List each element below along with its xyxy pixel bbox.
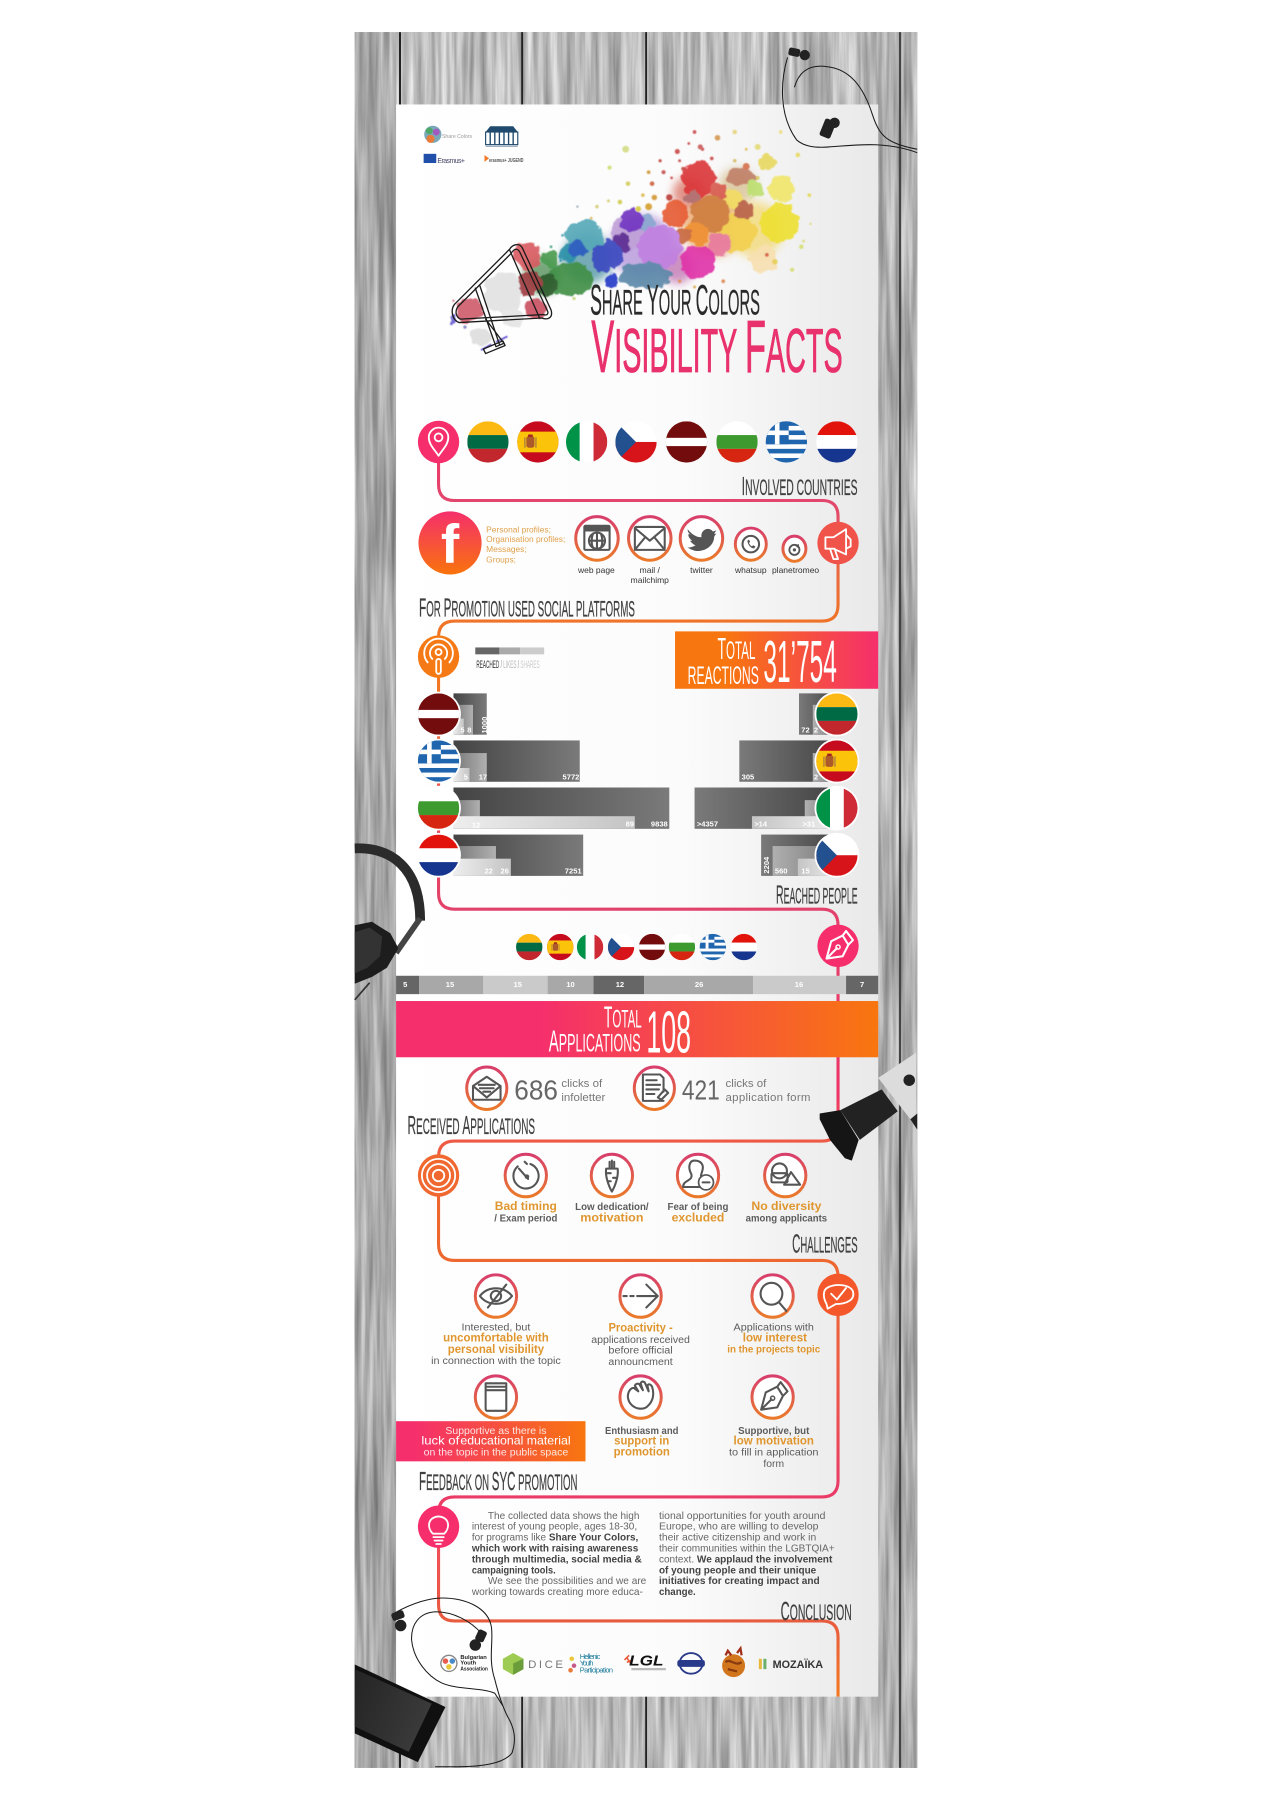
logo: globe xyxy=(722,1648,745,1677)
text: CHALLENGES xyxy=(792,1228,858,1258)
title: Visibility Facts: VISIBILITY FACTS xyxy=(591,305,843,388)
title: Share Your Colors: SHARE YOUR COLORS xyxy=(590,277,760,325)
bar chart: Netherlands: 7251 xyxy=(565,867,582,876)
icon: whatsapp xyxy=(735,528,766,560)
section: involved countries xyxy=(418,421,858,501)
icon: podcast node xyxy=(418,635,459,678)
icon: megaphone xyxy=(452,245,552,354)
partner logos bottom xyxy=(441,1648,823,1677)
bar chart: Italy: >14 xyxy=(754,820,768,829)
logo: LGL: LGL xyxy=(629,1653,664,1670)
logo: Hellenic Youth Participation: Youth xyxy=(580,1659,594,1668)
icon: target node xyxy=(418,1154,459,1197)
legend: REACHED / LIKES / SHARES xyxy=(476,659,540,671)
logo: Bulgarian Youth Association xyxy=(441,1655,488,1672)
logo: erasmus+ 2: erasmus+ JUGEND xyxy=(489,158,524,164)
stat: infoletter clicks xyxy=(467,1067,606,1110)
logo: Share Your Colors: Share Colors xyxy=(442,134,473,140)
feedback: low motivation: low motivation xyxy=(734,1434,814,1448)
props: headphones left xyxy=(355,848,420,1000)
stat: application form clicks: clicks of xyxy=(726,1078,767,1090)
poster sheet xyxy=(396,104,878,1697)
section: reached people: REACHED PEOPLE xyxy=(776,879,858,909)
logo: Bulgarian Youth Association: Bulgarian xyxy=(460,1655,487,1661)
conclusion text column 2: their active citizenship and work in xyxy=(659,1533,816,1544)
applications per country strip: 16 xyxy=(795,980,803,989)
platform labels: twitter xyxy=(690,565,713,575)
platform labels: web page xyxy=(577,565,615,575)
watercolour splash xyxy=(450,130,812,350)
feedback: educational material xyxy=(396,1376,585,1461)
bar chart: Spain: 305 xyxy=(742,772,754,781)
wood table background xyxy=(355,32,917,1768)
stat: application form clicks: 421 xyxy=(682,1075,720,1106)
logo: Mozaika: MOZAÏKA xyxy=(773,1658,823,1671)
challenge: no diversity: No diversity xyxy=(751,1199,822,1213)
conclusion text column 2: tional opportunities for youth around xyxy=(659,1511,825,1522)
logo: LGL xyxy=(625,1653,666,1670)
feedback: proactivity xyxy=(591,1275,690,1368)
stat: application form clicks xyxy=(634,1067,810,1110)
challenge: fear of being excluded: excluded xyxy=(672,1210,724,1224)
conclusion text column 1: campaigning tools. xyxy=(472,1565,556,1576)
bar chart: Greece: 17 xyxy=(479,772,487,781)
challenge: fear of being excluded: Fear of being xyxy=(668,1202,728,1213)
bar chart: Italy xyxy=(695,786,859,831)
icon: facebook xyxy=(418,511,482,575)
applications per country strip: 10 xyxy=(566,980,575,989)
challenge: low dedication xyxy=(575,1154,649,1224)
icon: twitter xyxy=(680,517,723,560)
bar chart: Greece xyxy=(416,739,580,783)
conclusion text column 1 xyxy=(471,1511,647,1598)
stat: infoletter clicks: clicks of xyxy=(561,1078,603,1090)
icon: bulb node xyxy=(418,1506,459,1548)
bar chart: Latvia xyxy=(416,692,489,736)
logo: Erasmus+: Erasmus+ xyxy=(437,158,465,165)
feedback: enthusiasm: Enthusiasm and xyxy=(605,1426,678,1437)
bar chart: Czech Republic xyxy=(761,833,859,878)
bar chart: Spain xyxy=(739,739,859,783)
props: earbuds top right xyxy=(782,47,917,153)
applications per country strip: 5 xyxy=(403,980,407,989)
feedback: uncomfortable: Interested, but xyxy=(462,1322,531,1333)
feedback: low interest xyxy=(727,1275,821,1355)
bar chart: Lithuania: 2 xyxy=(814,725,818,734)
conclusion text column 2: of young people and their unique xyxy=(659,1565,817,1576)
icon: location pin node xyxy=(418,421,459,463)
bar chart: Greece: 5 xyxy=(464,772,468,781)
conclusion text column 2: context. We applaud the involvement xyxy=(659,1554,833,1565)
logo: Hellenic Youth Participation xyxy=(568,1652,613,1675)
logo: DICE: DICE xyxy=(528,1659,566,1671)
feedback: enthusiasm xyxy=(605,1376,678,1459)
conclusion text column 2: Europe, who are willing to develop xyxy=(659,1522,819,1533)
feedback: educational material: on the topic in the public space xyxy=(424,1448,569,1459)
feedback: proactivity: applications received xyxy=(591,1335,690,1346)
feedback: enthusiasm: promotion xyxy=(614,1445,670,1459)
icon: facebook: f xyxy=(441,512,460,574)
challenge: low dedication: motivation xyxy=(580,1210,643,1224)
bar chart: Italy: >4357 xyxy=(697,820,718,829)
facebook usage list: Organisation profiles; xyxy=(486,534,565,544)
feedback: proactivity: Proactivity - xyxy=(608,1321,673,1335)
challenge: no diversity: among applicants xyxy=(746,1213,828,1224)
applications per country strip: 15 xyxy=(446,980,454,989)
section: conclusion xyxy=(418,1506,852,1626)
feedback: proactivity: announcment xyxy=(608,1357,673,1368)
bar chart: Italy: >31 xyxy=(802,820,815,829)
props: camera right xyxy=(820,1053,917,1161)
applications per country strip: 7 xyxy=(860,980,864,989)
banner: total reactions: 31’754 xyxy=(763,628,837,695)
small flags xyxy=(516,934,757,960)
platform labels: planetromeo xyxy=(772,565,819,575)
country flags xyxy=(467,421,858,463)
facebook usage list: Messages; xyxy=(486,544,527,554)
banner: total applications: APPLICATIONS xyxy=(549,1026,641,1059)
banner: total applications: TOTAL xyxy=(604,1001,642,1034)
bar chart: Latvia: 1000 xyxy=(480,717,489,734)
heading: received applications: RECEIVED APPLICATIONS xyxy=(408,1110,535,1140)
conclusion text column 1: We see the possibilities and we are xyxy=(488,1576,647,1587)
bar chart: Czech Republic: 15 xyxy=(801,867,810,876)
facebook usage list xyxy=(486,525,565,564)
feedback: low motivation: to fill in application xyxy=(729,1448,819,1459)
stat: infoletter clicks: 686 xyxy=(514,1075,558,1106)
section: received applications xyxy=(396,925,878,1140)
section: social platforms: FOR PROMOTION USED SOCIAL PLATFORMS xyxy=(419,592,635,622)
bar chart: Lithuania: 72 xyxy=(801,725,810,734)
bar chart: Netherlands: 22 xyxy=(484,867,493,876)
bar chart: Netherlands: 26 xyxy=(501,867,509,876)
legend xyxy=(475,647,544,671)
section: feedback xyxy=(396,1274,859,1496)
bar chart: Greece: 5772 xyxy=(563,772,579,781)
conclusion text column 2: initiatives for creating impact and xyxy=(659,1576,820,1587)
applications per country strip xyxy=(396,976,878,994)
challenge: bad timing xyxy=(494,1154,557,1224)
feedback: enthusiasm: support in xyxy=(614,1434,669,1448)
logo: DICE xyxy=(503,1653,566,1675)
partner logos top xyxy=(424,126,524,165)
platform labels xyxy=(577,565,819,585)
feedback: uncomfortable xyxy=(431,1275,561,1367)
conclusion text column 2 xyxy=(659,1511,835,1598)
banner: total applications xyxy=(396,999,878,1066)
feedback: uncomfortable: personal visibility xyxy=(448,1342,545,1356)
banner: total reactions xyxy=(675,628,878,695)
props: phone and earbuds bottom left xyxy=(355,1598,514,1767)
conclusion text column 2: their communities within the LGBTQIA+ xyxy=(659,1543,835,1554)
facebook usage list: Personal profiles; xyxy=(486,525,551,535)
feedback: educational material: Supportive as there is xyxy=(445,1426,547,1437)
feedback: uncomfortable: uncomfortable with xyxy=(443,1330,549,1344)
bar chart: Czech Republic: 560 xyxy=(775,867,788,876)
logo: Bulgarian Youth Association: Youth xyxy=(460,1661,477,1667)
bar chart: Spain: 2 xyxy=(814,772,818,781)
stat: infoletter clicks: infoletter xyxy=(561,1092,606,1104)
platform labels: mailchimp xyxy=(631,575,669,585)
conclusion text column 1: which work with raising awareness xyxy=(471,1543,639,1554)
heading: conclusion: CONCLUSION xyxy=(781,1596,852,1626)
applications per country strip: 26 xyxy=(695,980,703,989)
icon: check bubble node xyxy=(817,1274,859,1316)
section: social platforms xyxy=(418,511,859,622)
bar chart: Bulgaria xyxy=(416,786,669,831)
feedback: educational material: educational material xyxy=(460,1435,571,1448)
logo: Hellenic Youth Participation: Participation xyxy=(580,1666,613,1675)
section: reached people xyxy=(416,628,878,909)
logo: blue emblem xyxy=(677,1653,705,1674)
section: challenges xyxy=(418,1154,858,1258)
challenge: bad timing: / Exam period xyxy=(494,1213,557,1224)
logo: Hellenic Youth Participation: Hellenic xyxy=(580,1652,601,1661)
feedback: low interest: in the projects topic xyxy=(727,1344,821,1355)
banner: total applications: 108 xyxy=(646,999,691,1066)
platform labels: mail / xyxy=(640,565,661,575)
bar chart: Czech Republic: 2204 xyxy=(762,856,771,874)
conclusion text column 1: through multimedia, social media & xyxy=(472,1554,642,1565)
challenge: no diversity xyxy=(746,1154,828,1224)
banner: total reactions: REACTIONS xyxy=(688,662,759,690)
logo: Bulgarian Youth Association: Association xyxy=(460,1666,488,1672)
bar chart: Latvia: 5 xyxy=(460,725,465,734)
conclusion text column 1: working towards creating more educa- xyxy=(471,1587,643,1598)
platform labels: whatsup xyxy=(734,565,767,575)
feedback: uncomfortable: in connection with the topic xyxy=(431,1356,561,1367)
bar chart: Netherlands xyxy=(416,833,583,878)
bar chart: Bulgaria: 9838 xyxy=(651,820,668,829)
logo: building xyxy=(486,126,518,147)
feedback: low motivation: form xyxy=(763,1459,784,1470)
feedback: low motivation: Supportive, but xyxy=(738,1426,810,1437)
challenge: bad timing: Bad timing xyxy=(495,1199,557,1213)
heading: feedback on SYC promotion: FEEDBACK ON SYC PROMOTION xyxy=(419,1466,577,1496)
feedback: educational material: luck of xyxy=(421,1435,460,1448)
feedback: proactivity: before official xyxy=(608,1345,673,1356)
connecting timeline path xyxy=(439,459,838,1697)
bar chart: Latvia: 8 xyxy=(467,725,471,734)
icon: megaphone node xyxy=(817,522,859,564)
bar chart: Lithuania xyxy=(799,692,859,736)
conclusion text column 2: change. xyxy=(659,1587,696,1598)
facebook usage list: Groups; xyxy=(486,554,516,564)
text: INVOLVED COUNTRIES xyxy=(742,471,858,501)
challenge: low dedication: Low dedication/ xyxy=(575,1202,649,1213)
conclusion text column 1: The collected data shows the high xyxy=(488,1511,639,1522)
stat: application form clicks: application form xyxy=(726,1092,810,1104)
feedback: low motivation xyxy=(729,1376,819,1470)
icon: web page xyxy=(576,517,618,560)
icon: pen node xyxy=(817,925,859,967)
feedback: low interest: Applications with xyxy=(734,1322,814,1333)
title xyxy=(590,277,843,388)
applications per country strip: 12 xyxy=(616,980,624,989)
feedback: low interest: low interest xyxy=(743,1330,807,1344)
banner: total reactions: TOTAL xyxy=(718,633,755,666)
challenge: fear of being excluded xyxy=(668,1154,728,1224)
bar chart: Bulgaria: 12 xyxy=(472,821,480,830)
applications per country strip: 15 xyxy=(514,980,522,989)
conclusion text column 1: for programs like Share Your Colors, xyxy=(472,1533,638,1544)
conclusion text column 1: interest of young people, ages 18-30, xyxy=(472,1522,637,1533)
icon: mail xyxy=(629,517,671,560)
bar chart: Bulgaria: 89 xyxy=(626,820,634,829)
icon: planetromeo xyxy=(783,536,806,561)
